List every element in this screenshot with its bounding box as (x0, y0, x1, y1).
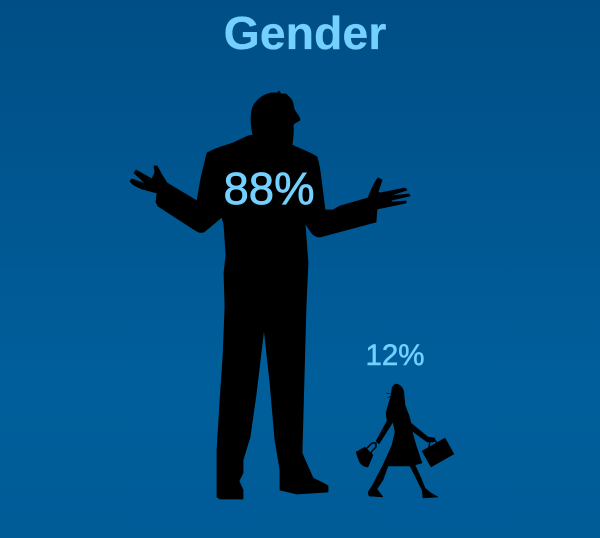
label: 88%: 88% (223, 163, 315, 214)
title: Gender (224, 7, 386, 59)
label: 12%: 12% (365, 339, 425, 372)
icon: woman silhouette with bags (356, 384, 454, 498)
icon: man silhouette (130, 91, 410, 499)
